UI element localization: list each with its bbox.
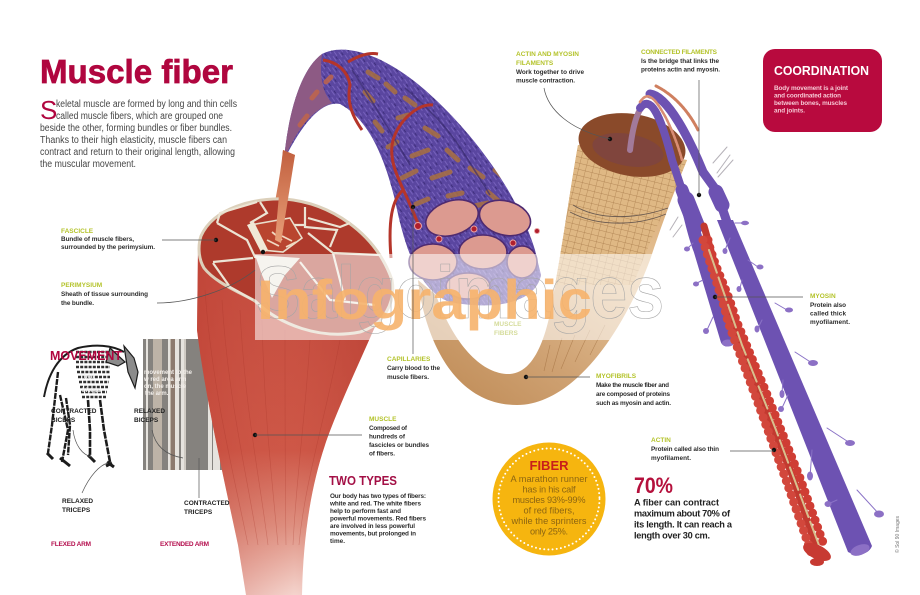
fiber callout circle: muscles 93%-99% bbox=[512, 495, 586, 505]
intro paragraph bbox=[40, 95, 237, 170]
biceps and triceps labels bbox=[51, 408, 230, 516]
label: muscle bbox=[255, 416, 429, 458]
watermark panel bbox=[255, 254, 660, 340]
two types text bbox=[329, 473, 426, 545]
label: myosin: Protein also bbox=[810, 302, 846, 309]
label: perimysium: Sheath of tissue surrounding bbox=[61, 291, 148, 298]
70 percent stat bbox=[634, 473, 733, 540]
two types text: TWO TYPES bbox=[329, 473, 397, 488]
fiber top end bbox=[573, 105, 691, 185]
movement heading and hidden text: Their bbox=[80, 374, 95, 380]
label: myofibrils: such as myosin and actin. bbox=[596, 400, 671, 407]
coordination panel: between bones, muscles bbox=[774, 100, 847, 107]
label: muscle fibers bbox=[494, 321, 522, 337]
purple fiber bundle bbox=[268, 50, 541, 305]
label: capillaries: Carry blood to the bbox=[387, 365, 440, 372]
label: muscle: MUSCLE bbox=[369, 416, 397, 423]
70 percent stat: maximum about 70% of bbox=[634, 508, 731, 518]
label: actin: ACTIN bbox=[651, 437, 671, 444]
label: myosin bbox=[715, 293, 850, 326]
strand ridges bbox=[352, 70, 490, 195]
70 percent stat: A fiber can contract bbox=[634, 498, 719, 508]
movement heading and hidden text bbox=[50, 348, 193, 397]
biceps and triceps labels: TRICEPS bbox=[184, 509, 213, 516]
intro paragraph: Thanks to their high elasticity, muscle fibers can bbox=[40, 135, 227, 146]
label: myosin: myofilament. bbox=[810, 319, 850, 326]
label: connected filaments: Is the bridge that links the bbox=[641, 58, 719, 65]
muscle cross section disc bbox=[199, 199, 393, 334]
fiber callout circle: of red fibers, bbox=[524, 506, 574, 516]
label: fascicle: surrounded by the perimysium. bbox=[61, 244, 155, 251]
coordination panel bbox=[763, 49, 882, 132]
label: actin and myosin: FILAMENTS bbox=[516, 60, 554, 67]
label: muscle: of fibers. bbox=[369, 450, 395, 458]
two types text: movements, but prolonged in bbox=[330, 530, 416, 538]
label: myofibrils: Make the muscle fiber and bbox=[596, 382, 669, 389]
movement heading and hidden text: biceps bbox=[82, 388, 102, 394]
watermark text: Infographic bbox=[257, 268, 592, 331]
label: actin and myosin: ACTIN AND MYOSIN bbox=[516, 51, 579, 58]
label: myofibrils bbox=[526, 373, 671, 407]
label: fascicle: FASCICLE bbox=[61, 228, 94, 235]
two types text: help to perform fast and bbox=[330, 508, 401, 515]
arm captions: FLEXED ARM bbox=[51, 541, 91, 548]
movement heading and hidden text: on, the muscle bbox=[144, 384, 187, 390]
intro paragraph: keletal muscle are formed by long and thin cells bbox=[56, 99, 237, 110]
title: Muscle fiber bbox=[40, 53, 233, 90]
myosin filaments bbox=[630, 86, 884, 558]
watermark text: Salgoimages bbox=[256, 251, 664, 334]
label: muscle: Composed of bbox=[369, 425, 408, 432]
two types text: white and red. The white fibers bbox=[329, 500, 421, 508]
label: capillaries: CAPILLARIES bbox=[387, 356, 431, 363]
two types text: time. bbox=[330, 538, 345, 545]
fiber callout circle: while the sprinters bbox=[510, 516, 587, 526]
coordination panel: and coordinated action bbox=[774, 92, 841, 100]
intro paragraph: called muscle fibers, which are grouped one bbox=[56, 111, 223, 122]
label: actin: Protein called also thin bbox=[651, 446, 719, 453]
biceps and triceps labels: CONTRACTED bbox=[184, 500, 230, 507]
movement heading and hidden text: w red area arm bbox=[143, 377, 186, 383]
label: fascicle: Bundle of muscle fibers, bbox=[61, 236, 134, 243]
blood vessels bbox=[323, 53, 433, 258]
70 percent stat: length over 30 cm. bbox=[634, 530, 710, 540]
credit: © Sol 90 Images bbox=[894, 515, 901, 553]
label: myosin: called thick bbox=[810, 310, 846, 318]
biceps and triceps labels: RELAXED bbox=[62, 498, 93, 505]
label: actin and myosin: muscle contraction. bbox=[516, 78, 575, 84]
label: muscle: hundreds of bbox=[369, 434, 406, 440]
label: muscle fibers: FIBERS bbox=[494, 330, 518, 337]
fiber callout circle: A marathon runner bbox=[510, 474, 588, 484]
arm captions: EXTENDED ARM bbox=[160, 541, 209, 548]
label: myofibrils: MYOFIBRILS bbox=[596, 373, 637, 380]
intro paragraph: the muscular movement. bbox=[40, 159, 136, 170]
fiber callout circle: has in his calf bbox=[522, 484, 576, 494]
movement heading and hidden text: MOVEMENT bbox=[50, 348, 122, 363]
coordination panel: and joints. bbox=[774, 108, 805, 114]
label: capillaries: muscle fibers. bbox=[387, 374, 429, 381]
biceps and triceps labels: BICEPS bbox=[134, 417, 159, 424]
arm captions bbox=[51, 541, 209, 548]
cross sections bbox=[409, 193, 537, 299]
label: actin and myosin: Work together to drive bbox=[516, 69, 584, 76]
coordination panel: COORDINATION bbox=[774, 63, 869, 78]
actin filament bbox=[703, 226, 834, 566]
label: muscle fibers: MUSCLE bbox=[494, 321, 522, 328]
main muscle bbox=[197, 150, 393, 595]
label: perimysium: the bundle. bbox=[61, 300, 94, 307]
muscle strand texture bbox=[298, 72, 503, 207]
fiber callout circle: FIBER bbox=[530, 458, 569, 473]
leader dots bbox=[214, 137, 776, 452]
biceps and triceps labels: CONTRACTED bbox=[51, 408, 97, 415]
label: muscle: fascicles or bundles bbox=[369, 442, 429, 449]
label: actin bbox=[651, 437, 774, 462]
coordination panel: Body movement is a joint bbox=[774, 85, 849, 92]
movement heading and hidden text: the arm. bbox=[145, 391, 169, 397]
barcode image placeholder bbox=[143, 339, 222, 470]
label: fascicle bbox=[61, 228, 216, 251]
two types text: Our body has two types of fibers: bbox=[330, 493, 426, 500]
biceps and triceps labels: RELAXED bbox=[134, 408, 165, 415]
biceps and triceps labels: TRICEPS bbox=[62, 507, 91, 514]
label: connected filaments: proteins actin and myosin. bbox=[641, 66, 720, 74]
label: actin: myofilament. bbox=[651, 455, 691, 462]
label: perimysium: PERIMYSIUM bbox=[61, 282, 102, 289]
two types text: are involved in less powerful bbox=[330, 523, 415, 530]
two types text: powerful movements. Red fibers bbox=[330, 516, 426, 522]
fascicle partitions bbox=[213, 202, 380, 305]
fiber callout circle: only 25%. bbox=[530, 526, 568, 536]
70 percent stat: its length. It can reach a bbox=[634, 520, 733, 530]
biceps and triceps labels: BICEPS bbox=[51, 417, 76, 424]
label: connected filaments: CONNECTED FILAMENTS bbox=[641, 49, 718, 56]
label: myofibrils: are composed of proteins bbox=[596, 391, 670, 398]
movement heading and hidden text: movement to the bbox=[144, 370, 193, 376]
fiber callout circle bbox=[492, 442, 606, 556]
label: capillaries bbox=[387, 207, 440, 381]
myosin heads bbox=[688, 223, 879, 514]
muscle fiber tube bbox=[418, 105, 691, 405]
label: perimysium bbox=[61, 270, 255, 307]
intro paragraph: S bbox=[40, 95, 57, 125]
label: myosin: MYOSIN bbox=[810, 293, 836, 300]
skeleton drawing bbox=[44, 346, 138, 467]
label: actin and myosin bbox=[516, 51, 610, 139]
label: connected filaments bbox=[641, 49, 720, 195]
intro paragraph: contract and return to their original length, allowing bbox=[40, 147, 235, 158]
intro paragraph: beside the other, forming bundles or fiber bundles. bbox=[40, 123, 232, 134]
70 percent stat: 70% bbox=[634, 473, 673, 498]
